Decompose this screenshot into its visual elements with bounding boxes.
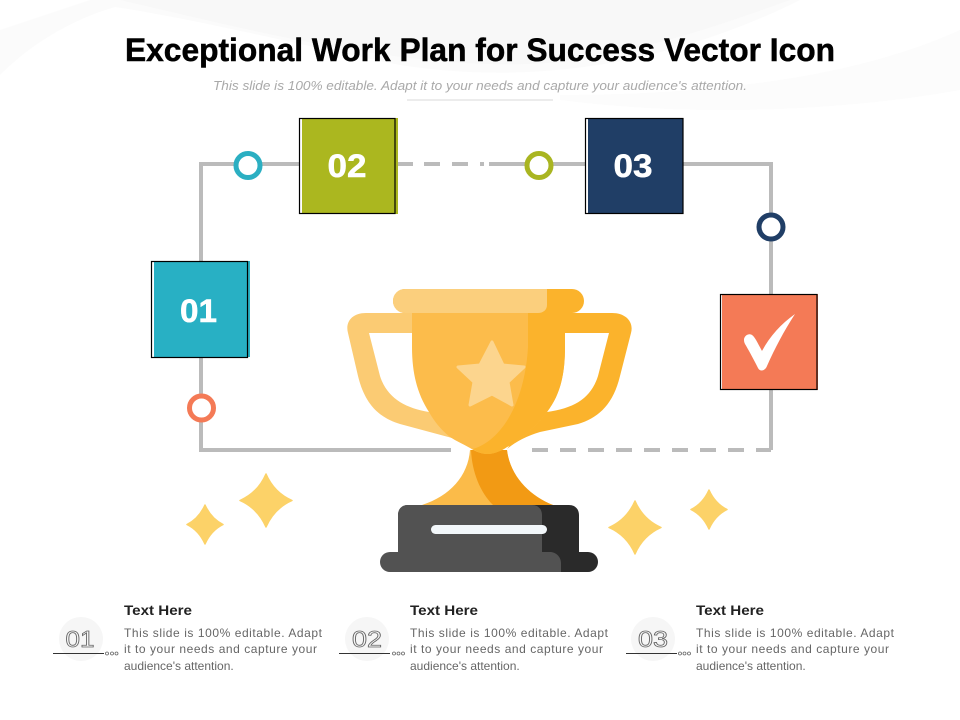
marker: navy ring [759, 215, 783, 239]
body 01: This slide is 100% editable. Adapt [124, 626, 323, 640]
number badge 03 [626, 617, 690, 661]
body 02: This slide is 100% editable. Adapt [410, 626, 609, 640]
number badge 02 [339, 617, 404, 661]
body 01: it to your needs and capture your [124, 642, 317, 656]
trophy handle right [507, 313, 632, 449]
footer item 03 [626, 603, 895, 673]
step box 02: 02 [328, 148, 366, 184]
trophy handle left [347, 313, 452, 438]
marker: olive ring [527, 154, 551, 178]
footer item 01 [53, 603, 323, 673]
trophy plate [431, 525, 547, 534]
heading 02: Text Here [410, 603, 479, 618]
heading 03: Text Here [696, 603, 765, 618]
number badge 01 [53, 617, 118, 661]
sparkle left small [187, 505, 223, 544]
number badge 03: 03 [638, 626, 668, 652]
process path connector [201, 164, 771, 450]
subtitle: This slide is 100% editable. Adapt it to your needs and capture your audience's attention. [213, 79, 747, 93]
title: Exceptional Work Plan for Success Vector Icon [125, 32, 835, 68]
step box 03: 03 [614, 148, 652, 184]
sparkle right small [691, 490, 727, 529]
step box 01: 01 [180, 293, 217, 329]
footer item 02 [339, 603, 609, 673]
trophy base [398, 505, 598, 572]
sparkle right large [609, 501, 661, 554]
step box 02 [300, 118, 398, 214]
body 03: This slide is 100% editable. Adapt [696, 626, 895, 640]
step box 03 [586, 118, 683, 214]
trophy cup [412, 312, 565, 454]
sparkle left large [240, 474, 292, 527]
body 02 [410, 626, 609, 673]
body 02: audience's attention. [410, 659, 520, 673]
body 03: audience's attention. [696, 659, 806, 673]
trophy stem [422, 450, 553, 505]
marker: teal ring [236, 154, 260, 178]
trophy star [458, 342, 524, 405]
body 01 [124, 626, 323, 673]
trophy [347, 289, 632, 572]
number badge 02: 02 [352, 626, 382, 652]
body 03 [696, 626, 895, 673]
step box: check mark [720, 294, 818, 390]
step box 01 [152, 261, 250, 358]
body 02: it to your needs and capture your [410, 642, 603, 656]
body 03: it to your needs and capture your [696, 642, 889, 656]
heading 01: Text Here [124, 603, 193, 618]
body 01: audience's attention. [124, 659, 234, 673]
trophy rim [393, 289, 584, 313]
number badge 01: 01 [66, 626, 94, 652]
marker: coral ring [190, 396, 214, 420]
